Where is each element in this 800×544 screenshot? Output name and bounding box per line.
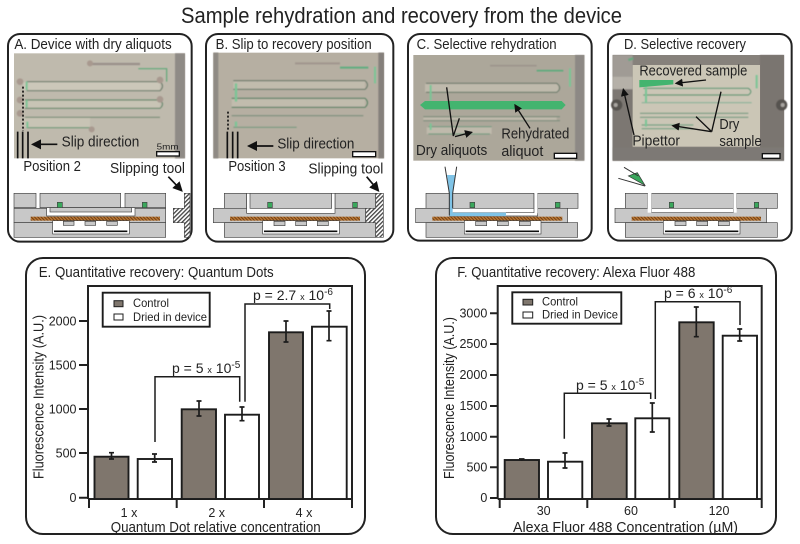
x axis title E: Quantum Dot relative concentration xyxy=(111,520,321,536)
panel B: slip to recovery position xyxy=(206,34,393,242)
legend F: Dried in Device xyxy=(542,308,618,322)
significance brackets F xyxy=(564,302,740,439)
error bars E xyxy=(109,311,332,462)
legend E xyxy=(103,293,210,327)
cross-section schematic D xyxy=(615,193,777,237)
p value: 5e-5: p = 5 x 10 xyxy=(172,360,231,376)
panel D: selective recovery xyxy=(608,34,792,241)
rehydrated aliquot label xyxy=(501,126,569,160)
heading A: A. Device with dry aliquots xyxy=(14,37,172,53)
x tick labels E: 1 x xyxy=(121,506,138,520)
y tick labels E: 1500 xyxy=(49,358,77,372)
legend F: Control xyxy=(542,294,578,308)
slip direction label: Slip direction xyxy=(62,135,139,151)
axes E xyxy=(79,286,352,508)
photo B xyxy=(213,53,384,158)
cross-section schematic B xyxy=(213,193,383,237)
legend E: Control xyxy=(133,296,169,310)
y tick labels E: 1000 xyxy=(49,402,77,416)
y tick labels F xyxy=(459,306,487,505)
y axis title F: Fluorescence Intensity (A.U.) xyxy=(442,317,458,479)
panel C: selective rehydration xyxy=(408,34,592,241)
recovered arrow xyxy=(676,80,706,83)
dry aliquots label: Dry aliquots xyxy=(416,143,487,159)
title: Sample rehydration and recovery from the device xyxy=(181,3,622,28)
x tick labels F: 60 xyxy=(624,504,638,518)
x axis title F: Alexa Fluor 488 Concentration (µM) xyxy=(513,520,738,536)
panel A: device with dry aliquots xyxy=(8,34,192,242)
p value: 5e-5: -5 xyxy=(635,377,645,388)
rehydrated arrow xyxy=(515,105,530,128)
x tick labels E xyxy=(121,506,313,520)
pipette with blue liquid xyxy=(445,167,506,216)
p value: 6e-6: p = 6 x 10 xyxy=(664,285,723,301)
scale bar xyxy=(157,141,179,156)
dry sample label: sample xyxy=(719,134,762,150)
y tick labels F: 2500 xyxy=(459,337,487,351)
scale bar: 5mm xyxy=(157,141,179,151)
heading D: D. Selective recovery xyxy=(624,37,747,53)
slip arrow xyxy=(33,142,57,147)
photo D xyxy=(611,55,787,161)
y tick labels F: 3000 xyxy=(459,306,487,320)
axes F xyxy=(490,286,762,508)
slipping tool label: Slipping tool xyxy=(308,161,383,177)
x tick labels F xyxy=(537,504,729,518)
heading C: C. Selective rehydration xyxy=(417,37,557,53)
bars E xyxy=(94,327,347,499)
x tick labels E: 2 x xyxy=(208,506,226,520)
dry aliquots arrows xyxy=(447,87,472,137)
slip direction label: Slip direction xyxy=(277,136,354,152)
slipping tool label: Slipping tool xyxy=(110,161,185,177)
rehydrated aliquot label: aliquot xyxy=(501,144,543,160)
dry sample label xyxy=(719,117,762,150)
y axis title E: Fluorescence Intensity (A.U.) xyxy=(32,315,48,479)
pipettor label: Pipettor xyxy=(632,134,680,150)
y tick labels F: 1500 xyxy=(459,399,487,413)
tool arrow xyxy=(168,177,182,191)
y tick labels F: 0 xyxy=(480,491,487,505)
y tick labels F: 1000 xyxy=(459,430,487,444)
panel F: Alexa Fluor chart xyxy=(436,258,776,536)
legend E: Dried in device xyxy=(133,310,207,324)
pipette tip with recovered sample xyxy=(618,167,645,186)
position label: Position 3 xyxy=(228,159,286,175)
dry sample arrows xyxy=(673,92,721,132)
y tick labels E xyxy=(49,314,77,505)
p value: 5e-5: -5 xyxy=(231,360,241,371)
p value: 2.7e-6: p = 2.7 x 10 xyxy=(253,287,324,303)
pipettor arrow xyxy=(623,89,634,135)
scale bar xyxy=(353,152,376,157)
y tick labels E: 2000 xyxy=(49,314,77,328)
p value: 2.7e-6: -6 xyxy=(324,287,333,298)
y tick labels E: 0 xyxy=(70,491,77,505)
heading B: B. Slip to recovery position xyxy=(216,37,372,53)
x tick labels E: 4 x xyxy=(296,506,313,520)
y tick labels F: 2000 xyxy=(459,368,487,382)
scale bar xyxy=(554,153,577,158)
cross-section schematic C xyxy=(416,193,578,237)
bars F xyxy=(505,322,757,499)
panel E: quantum dots chart xyxy=(26,258,365,536)
heading E: E. Quantitative recovery: Quantum Dots xyxy=(39,264,274,281)
p value: 6e-6: -6 xyxy=(723,285,733,296)
slip arrow xyxy=(249,143,273,148)
error bars F xyxy=(519,307,742,468)
heading F: F. Quantitative recovery: Alexa Fluor 488 xyxy=(457,264,695,281)
scale bar xyxy=(762,154,780,158)
x tick labels F: 120 xyxy=(709,504,729,518)
rehydrated aliquot label: Rehydrated xyxy=(501,126,569,142)
x tick labels F: 30 xyxy=(537,504,551,518)
photo C xyxy=(413,55,584,161)
recovered sample label: Recovered sample xyxy=(639,64,747,80)
legend F xyxy=(512,292,621,324)
y tick labels F: 500 xyxy=(466,460,487,474)
p value: 5e-5: p = 5 x 10 xyxy=(576,377,635,393)
position label: Position 2 xyxy=(23,159,81,175)
photo A xyxy=(14,53,185,158)
cross-section schematic A xyxy=(14,193,190,237)
dry sample label: Dry xyxy=(719,117,740,133)
y tick labels E: 500 xyxy=(56,446,77,460)
tool arrow xyxy=(367,177,378,191)
significance brackets E xyxy=(155,304,330,442)
